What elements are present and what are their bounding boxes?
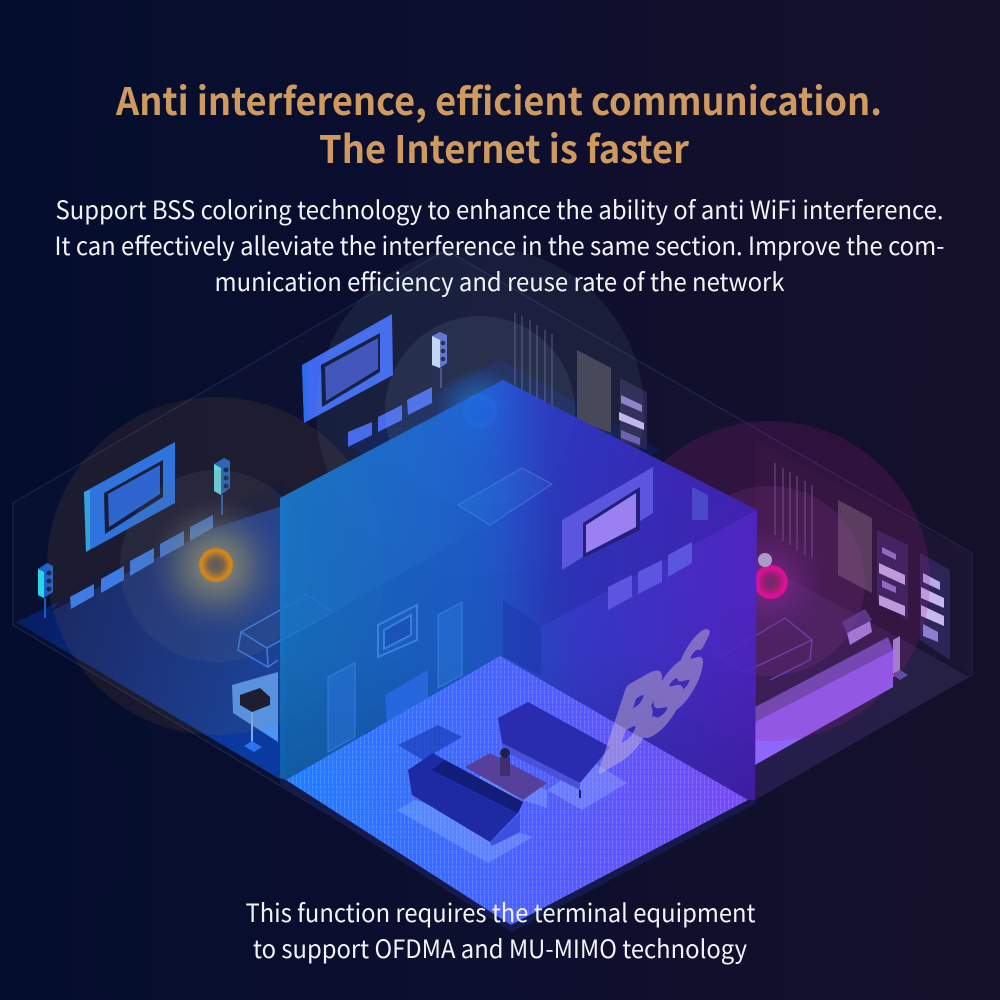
- description text: [54, 191, 944, 299]
- right room glass table: [720, 618, 812, 680]
- left room cabinet row: [70, 515, 213, 609]
- back room TV: [302, 314, 393, 423]
- right room floor lamp: [892, 640, 908, 680]
- right room hanging lines: [775, 463, 812, 558]
- left room floor: [16, 500, 285, 780]
- title: [115, 71, 882, 174]
- translucent central room: [280, 380, 757, 932]
- footnote: [246, 894, 756, 966]
- title: The Internet is faster: [319, 119, 689, 174]
- sofa facing front: [498, 702, 610, 798]
- back room visible through right wall: [503, 380, 757, 627]
- vase: [500, 748, 510, 776]
- coffee table: [465, 753, 547, 800]
- right room floor: [755, 560, 969, 800]
- TV seen through wall: [562, 467, 653, 570]
- cabinets seen through wall: [608, 542, 692, 610]
- back room speaker: [432, 332, 447, 388]
- lighter upper band of left wall: [280, 380, 503, 643]
- left room TV: [84, 442, 175, 552]
- description text: It can effectively alleviate the interference in the same section. Improve the com-: [54, 227, 944, 263]
- fireplace: [365, 670, 438, 745]
- right room sofa: [755, 609, 900, 765]
- floor: [286, 656, 748, 925]
- speaker seen through wall: [692, 487, 708, 520]
- description text: Support BSS coloring technology to enhance the ability of anti WiFi interference.: [56, 191, 944, 227]
- isometric house illustration: [13, 247, 972, 932]
- description text: munication efficiency and reuse rate of the network: [214, 263, 785, 299]
- dark floor vent: [398, 725, 462, 760]
- title: Anti interference, efficient communication.: [115, 71, 882, 126]
- picture on wall: [378, 605, 417, 657]
- ceiling lamp: [758, 553, 772, 567]
- BSS lettering: S: [637, 627, 695, 763]
- glass table seen through wall: [458, 468, 552, 525]
- BSS lettering: S: [664, 599, 711, 737]
- right room wall panel: [838, 500, 872, 593]
- back room wall panel: [577, 350, 611, 433]
- central room walls: [280, 380, 757, 925]
- back room cabinets: [348, 387, 432, 447]
- rugs: [397, 760, 627, 863]
- floor-standing speakers on wall: [328, 602, 462, 752]
- back room bookshelf: [619, 378, 647, 450]
- left room glass table: [238, 595, 333, 667]
- left room: [16, 442, 333, 780]
- BSS lettering: B: [591, 628, 670, 800]
- signal circles: magenta router: [610, 421, 930, 741]
- signal circles: orange router: [47, 397, 385, 735]
- house shell outline: [13, 250, 972, 925]
- signal circles: blue router: [316, 247, 644, 575]
- inner wall corner: [503, 600, 541, 676]
- left room armchair and lamp: [232, 672, 278, 752]
- back room hanging lines: [515, 313, 552, 408]
- dark wall band behind left room: [50, 480, 285, 612]
- low wall edge along floor: [280, 778, 755, 932]
- back room: [302, 313, 660, 540]
- sofa facing back: [408, 753, 523, 846]
- BSS lettering: [591, 599, 711, 800]
- right room bookshelf 1: [877, 530, 908, 620]
- right room back wall: [755, 440, 972, 675]
- left room speaker 2: [214, 458, 230, 515]
- right room: [720, 440, 972, 800]
- left room speaker 1: [38, 563, 53, 618]
- footnote: This function requires the terminal equipment: [246, 894, 756, 930]
- footnote: to support OFDMA and MU-MIMO technology: [253, 930, 747, 966]
- back room floor: [340, 360, 660, 540]
- right room bookshelf 2: [920, 553, 950, 660]
